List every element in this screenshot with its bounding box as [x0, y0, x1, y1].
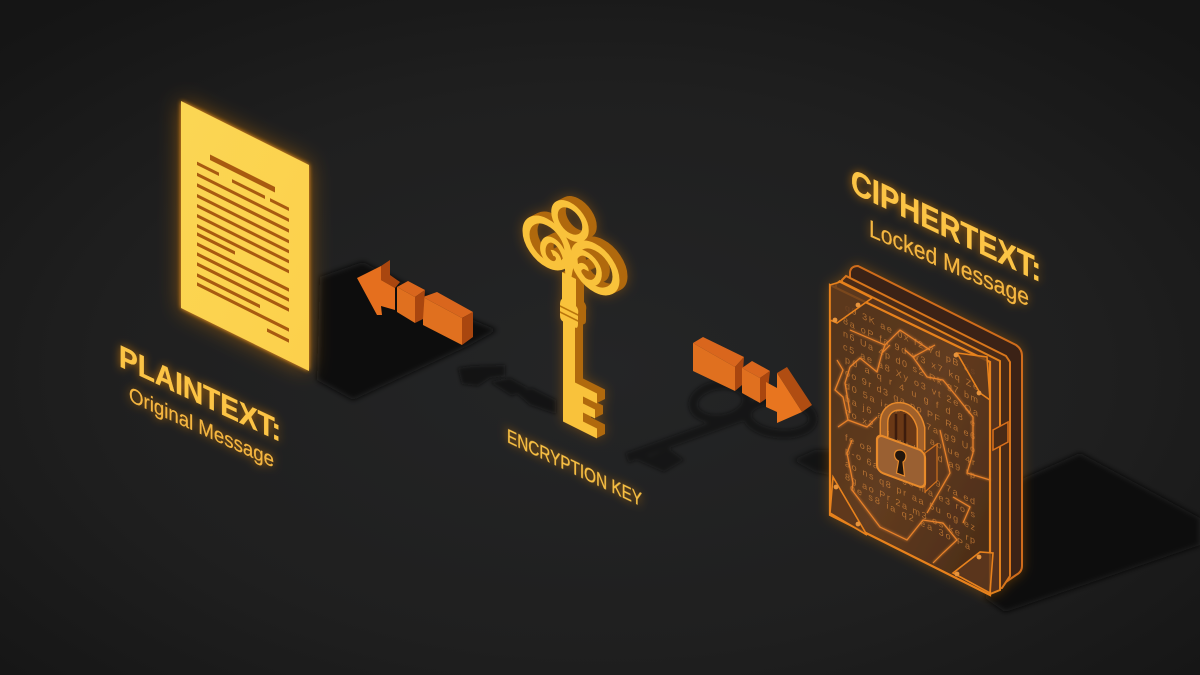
arrow: key to plaintext: [357, 260, 473, 345]
cipher characters: qo x2 ca g8 oe nd a9 tp: [845, 406, 975, 482]
cipher characters: p-o 6a R9 go ma e3 ro s: [845, 445, 975, 521]
bracket rivets: [833, 303, 981, 576]
cipher characters: fe o8 a4 po ag n9 7a ed: [845, 432, 975, 508]
heading: PLAINTEXT: PLAINTEXT:: [119, 338, 281, 449]
corner brackets: [830, 282, 993, 593]
subheading: Locked Message: Locked Message: [869, 215, 1029, 312]
label: encryption key: ENCRYPTION KEY: [507, 426, 642, 512]
label: ciphertext: [851, 162, 1041, 312]
panel: ciphertext locked book: [830, 266, 1022, 595]
cipher characters: oe s8 ia q2 ea 3o Pa: [850, 482, 971, 553]
cracks: [835, 330, 990, 563]
cast shadows on the floor: [317, 262, 1200, 612]
icon: padlock: [877, 406, 937, 492]
label: plaintext: [119, 338, 281, 472]
cipher characters: n6 Ua 4p d0 s2 Rk g7 bm: [843, 328, 978, 406]
page stack: [842, 276, 1010, 590]
icon: encryption key: [526, 176, 624, 452]
cipher characters: q9 3K ae 0x f2 7d pB 8s: [845, 302, 975, 378]
cipher characters: 8g ao Pr 2a m3 os ke rp: [845, 471, 975, 547]
cipher characters: 8a oP fa 9d w3 x7 kq Ze: [843, 315, 978, 393]
cipher characters: ao ns q8 pr aa 5u og ez: [845, 458, 975, 534]
subheading: Original Message: Original Message: [129, 382, 274, 472]
cipher characters: c5 ae a8 Xy o3 vt 2e Qa: [843, 341, 979, 420]
arrow: key to ciphertext: [693, 337, 812, 423]
cipher characters: p0 a q r 4 u g f d 8 e: [845, 354, 975, 430]
cipher characters: oo 9r d3 ga po PF Ra e6: [845, 367, 975, 443]
front cover: [830, 285, 990, 595]
clasp: [993, 422, 1008, 450]
panel: plaintext document: [181, 101, 309, 371]
cipher characters: d0 5a ig a8 rt 7a g9 Uo: [845, 380, 975, 456]
document sheet: [181, 101, 309, 371]
cipher characters: ba j6 a7 po 3k ao ue 4r: [845, 393, 976, 469]
heading: CIPHERTEXT: CIPHERTEXT:: [851, 162, 1041, 290]
document text lines: [197, 151, 289, 341]
back cover: [850, 266, 1022, 582]
cipher characters: [843, 302, 979, 553]
